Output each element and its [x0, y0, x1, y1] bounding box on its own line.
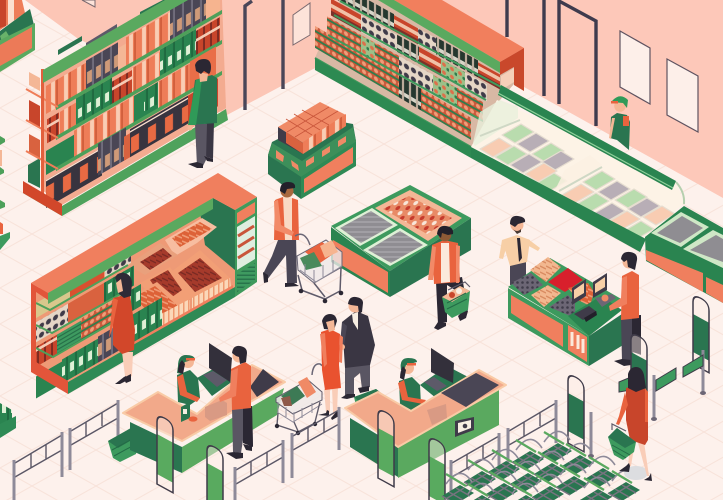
display top — [31, 173, 257, 293]
stand dark left face — [268, 155, 301, 199]
freezer glass lid 1 — [335, 208, 398, 246]
freezer top — [331, 185, 471, 271]
shelf row 2 products — [47, 14, 222, 145]
cold-case row 1 — [333, 0, 500, 89]
cashier 2 — [398, 358, 426, 410]
upper bin meats — [128, 218, 217, 275]
shelf row 3 products — [46, 43, 222, 177]
freezer: centre — [331, 185, 471, 297]
checkout 1 card terminal — [181, 402, 198, 422]
checkout 2 monitor desk — [420, 366, 470, 398]
register platform — [568, 296, 622, 336]
wall poster 1 — [620, 31, 650, 104]
stanchion fence 5 — [451, 433, 499, 500]
wall poster left — [293, 3, 310, 45]
checkout 2 base dark — [350, 418, 398, 477]
shopping cart: centre — [295, 234, 343, 303]
checkout 2 conveyor — [441, 373, 499, 407]
checkout 2 keyboard — [424, 377, 447, 391]
wall poster 2 — [667, 59, 698, 132]
counter left panel — [508, 288, 589, 366]
display green strip — [48, 198, 213, 304]
cold-case top — [394, 0, 524, 62]
checkout 2 card reader — [455, 417, 474, 437]
checkout 2 base light — [398, 390, 499, 478]
wall door frames right — [507, 0, 596, 126]
bin: sausages and steak — [171, 250, 231, 310]
stand right face — [301, 141, 356, 199]
counter end panel — [568, 325, 587, 362]
stand green tray — [268, 118, 356, 178]
freezer: far right — [645, 206, 723, 303]
display shelf edges — [36, 265, 128, 357]
display shelf row 3 — [35, 284, 141, 367]
stanchion fence 2 — [70, 400, 118, 470]
security gate 4 — [429, 436, 445, 500]
person: man pushing cart — [263, 182, 299, 287]
person: woman in red with cart — [318, 314, 343, 420]
promo stand: stacked boxes — [268, 102, 356, 199]
shopping basket: couple side — [354, 389, 386, 422]
person: man in orange sweater at butcher — [609, 252, 641, 366]
security gate 7 — [693, 294, 709, 373]
display dark back — [200, 198, 235, 270]
checkout 1 conveyor — [250, 369, 279, 397]
display shelf row 2 — [36, 265, 134, 342]
deli end glass — [676, 182, 684, 204]
person: man in dark suit — [339, 297, 375, 399]
stanchion fence 3 — [235, 440, 283, 500]
back wall: left section — [25, 0, 345, 115]
display shelf row 1 — [36, 247, 131, 318]
shelf back panel — [42, 0, 226, 205]
shelf upright — [41, 69, 44, 194]
deli counter — [471, 85, 684, 252]
cold-case green header — [378, 0, 500, 73]
shelf unit: top-left aisle — [23, 0, 228, 216]
counter food trays — [511, 257, 594, 318]
counter right face — [589, 310, 628, 366]
display shelf bottom row — [36, 297, 162, 399]
person: customer in orange at checkout 1 — [219, 346, 253, 459]
shopping basket on floor left — [108, 428, 140, 462]
stanchion fence 1 — [14, 432, 62, 500]
person: woman with basket bottom right — [616, 367, 652, 481]
display base — [68, 287, 235, 394]
shelf base — [23, 109, 228, 216]
shopping basket: woman bottom right — [608, 424, 636, 460]
bin: front meat — [130, 282, 188, 333]
parked shopping carts — [442, 431, 640, 500]
cold-case row 2 — [331, 0, 487, 101]
shopping basket: man — [442, 282, 470, 318]
deli glass divider — [473, 100, 602, 192]
checkout 2 parcel — [427, 404, 447, 425]
top-left corner stand — [0, 0, 35, 72]
deli food trays — [480, 124, 675, 240]
stacked boxes top — [278, 102, 346, 143]
wall picture top-left — [82, 0, 95, 7]
cold-case red side — [500, 48, 524, 91]
checkout 1 top — [123, 365, 285, 441]
turnstile posts and doors — [588, 350, 706, 458]
shelf bottom row products — [46, 74, 218, 208]
fridge front — [235, 197, 257, 297]
person: man in green jacket — [188, 59, 217, 168]
freezer left panel — [331, 227, 390, 297]
display interior — [36, 198, 235, 382]
checkout 1 — [123, 343, 285, 473]
checkout 1 monitor desk — [197, 364, 240, 396]
cold-case row 3 — [327, 16, 483, 122]
display left end — [31, 283, 68, 394]
cashier 1 — [177, 355, 200, 405]
stacked boxes left face — [278, 127, 303, 154]
back wall: right section — [441, 0, 723, 198]
cold-case back — [315, 0, 514, 147]
wall door frames left — [245, 0, 283, 110]
freezer right panel — [390, 218, 471, 297]
left-edge products bottom — [0, 403, 16, 438]
security gate 1 — [157, 414, 173, 493]
shelf signs behind header — [58, 0, 170, 55]
freezer goods — [375, 190, 462, 241]
checkout 2 top — [345, 370, 506, 447]
left-edge shelf fragments — [0, 136, 10, 250]
bin: middle meat — [140, 267, 192, 327]
display unit: fresh meat and fridge — [31, 173, 257, 399]
staff woman behind deli counter — [609, 96, 630, 150]
counter top — [508, 258, 623, 336]
display lip — [133, 285, 233, 347]
person: man in shirt and tie — [499, 216, 540, 285]
checkout 2 monitor — [431, 348, 454, 383]
butcher checkout counter — [508, 257, 628, 366]
shopping cart: couple — [275, 364, 331, 435]
shelf side items — [26, 72, 58, 188]
person: woman in red at display — [109, 273, 135, 384]
checkout 1 monitor — [209, 343, 232, 382]
stanchion fence 6 — [508, 400, 556, 470]
checkout 2 — [345, 348, 506, 478]
checkout 1 keyboard — [203, 371, 227, 387]
stanchion fence 4 — [292, 407, 339, 478]
deli interior — [471, 100, 684, 238]
cold-case row 4 — [315, 26, 471, 140]
checkout 1 parcel — [205, 400, 227, 421]
shelf row 1 products — [46, 0, 222, 116]
checkout 1 base dark — [130, 422, 182, 473]
checkout 1 base light — [182, 388, 284, 473]
security gate 5 — [568, 373, 584, 452]
deli back bar — [498, 85, 676, 190]
security gate 2 — [207, 443, 223, 500]
freezer glass lid 2 — [363, 228, 428, 266]
person: man in vest with basket — [428, 226, 468, 330]
security gate 3 — [378, 408, 394, 487]
register monitors — [572, 273, 616, 322]
stacked boxes right face — [303, 114, 346, 154]
shelf header strip — [43, 0, 188, 83]
cold-case base — [315, 58, 471, 158]
security gate 6 — [631, 332, 647, 411]
deli front base — [471, 147, 646, 252]
cold-case shelving: top right — [315, 0, 524, 158]
cold-case shelf edges — [315, 1, 501, 147]
